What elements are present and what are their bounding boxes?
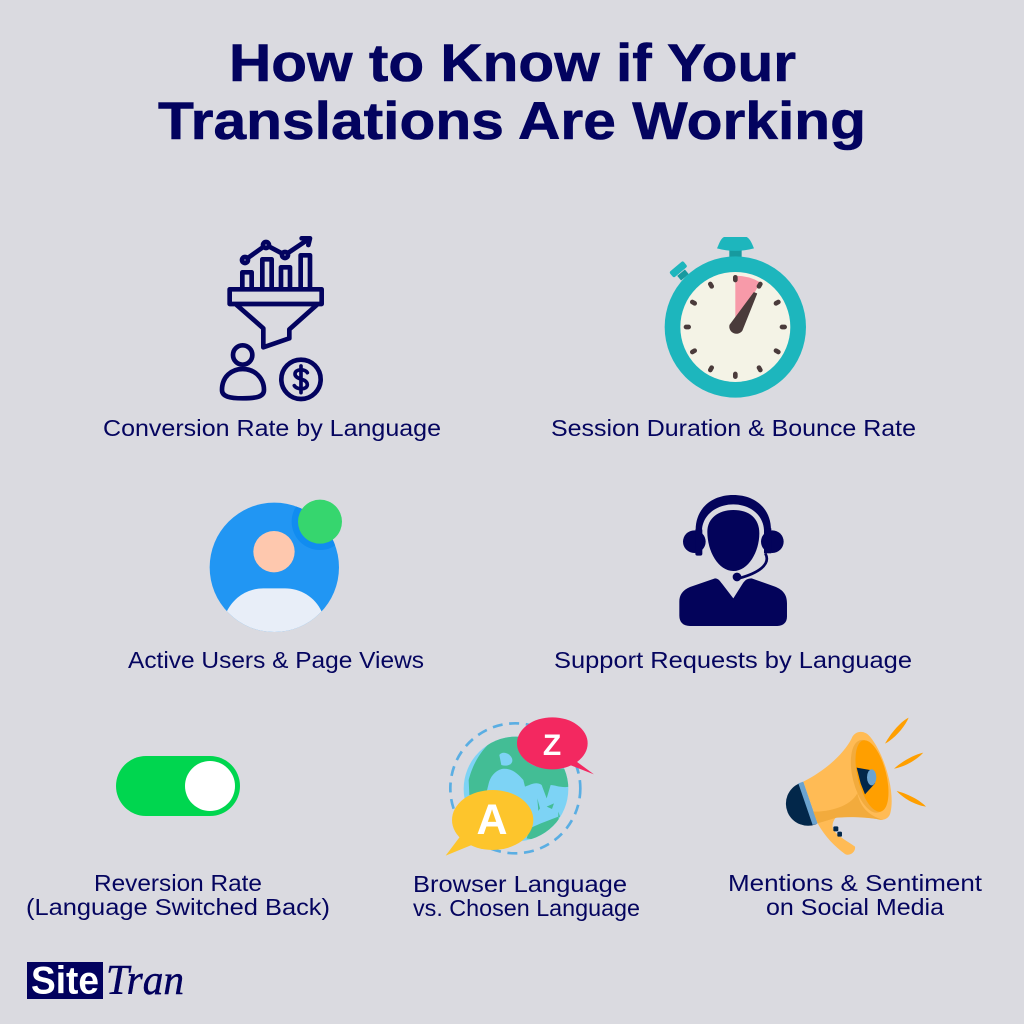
letter Z: Z [543, 729, 561, 762]
icon: funnel with chart, user and dollar [222, 238, 322, 399]
icon: toggle switch [116, 756, 240, 816]
label: browser language: Browser Language [413, 871, 627, 897]
label: conversion rate: Conversion Rate by Language [103, 415, 441, 441]
label: reversion rate [26, 870, 330, 920]
label: session duration: Session Duration & Bounce Rate [551, 415, 916, 441]
label: support requests: Support Requests by Language [554, 647, 912, 673]
icon: megaphone [786, 718, 926, 855]
title [158, 34, 866, 151]
label: mentions and sentiment: Mentions & Sentiment [728, 870, 983, 896]
title: Translations Are Working [158, 92, 866, 151]
label: reversion rate: (Language Switched Back) [26, 894, 330, 920]
label: active users: Active Users & Page Views [128, 647, 424, 673]
title: How to Know if Your [229, 34, 796, 93]
label: mentions and sentiment [728, 870, 983, 920]
label: reversion rate: Reversion Rate [94, 870, 262, 896]
logo: SiteTran: Tran [106, 958, 184, 1004]
label: browser language [413, 871, 640, 921]
icon: globe with speech bubbles [446, 717, 594, 856]
icon: active user [210, 500, 342, 632]
icon: stopwatch [665, 237, 806, 398]
label: browser language: vs. Chosen Language [413, 895, 640, 921]
logo: SiteTran [27, 958, 184, 1004]
letter A: A [476, 796, 508, 844]
label: mentions and sentiment: on Social Media [766, 894, 944, 920]
icon: support agent with headset [679, 495, 787, 626]
logo: SiteTran: Site [31, 960, 99, 1002]
